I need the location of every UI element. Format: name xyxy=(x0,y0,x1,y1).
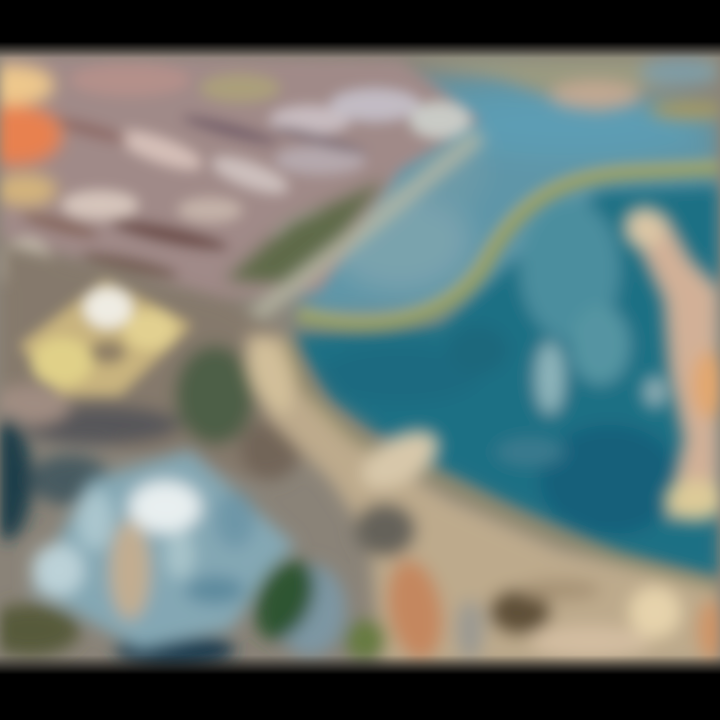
city blocks upper left xyxy=(0,55,480,300)
top black band xyxy=(0,0,720,58)
light blue domed complex xyxy=(30,450,295,650)
green and yellow causeway xyxy=(298,164,720,323)
upper bay water xyxy=(300,70,720,320)
green grove with blue ring xyxy=(244,551,385,660)
mid-left city district xyxy=(0,240,330,480)
green park strip xyxy=(225,135,480,320)
lower right waterfront buildings xyxy=(355,504,720,664)
sandy shoreline xyxy=(238,331,720,665)
lower bay water xyxy=(288,185,720,580)
dark left edge xyxy=(0,420,235,668)
sunset glow xyxy=(0,65,62,206)
distant shore at top right xyxy=(400,58,720,119)
right peninsula xyxy=(625,208,720,520)
yellow diamond plaza xyxy=(20,280,192,395)
bottom black band xyxy=(0,655,720,720)
